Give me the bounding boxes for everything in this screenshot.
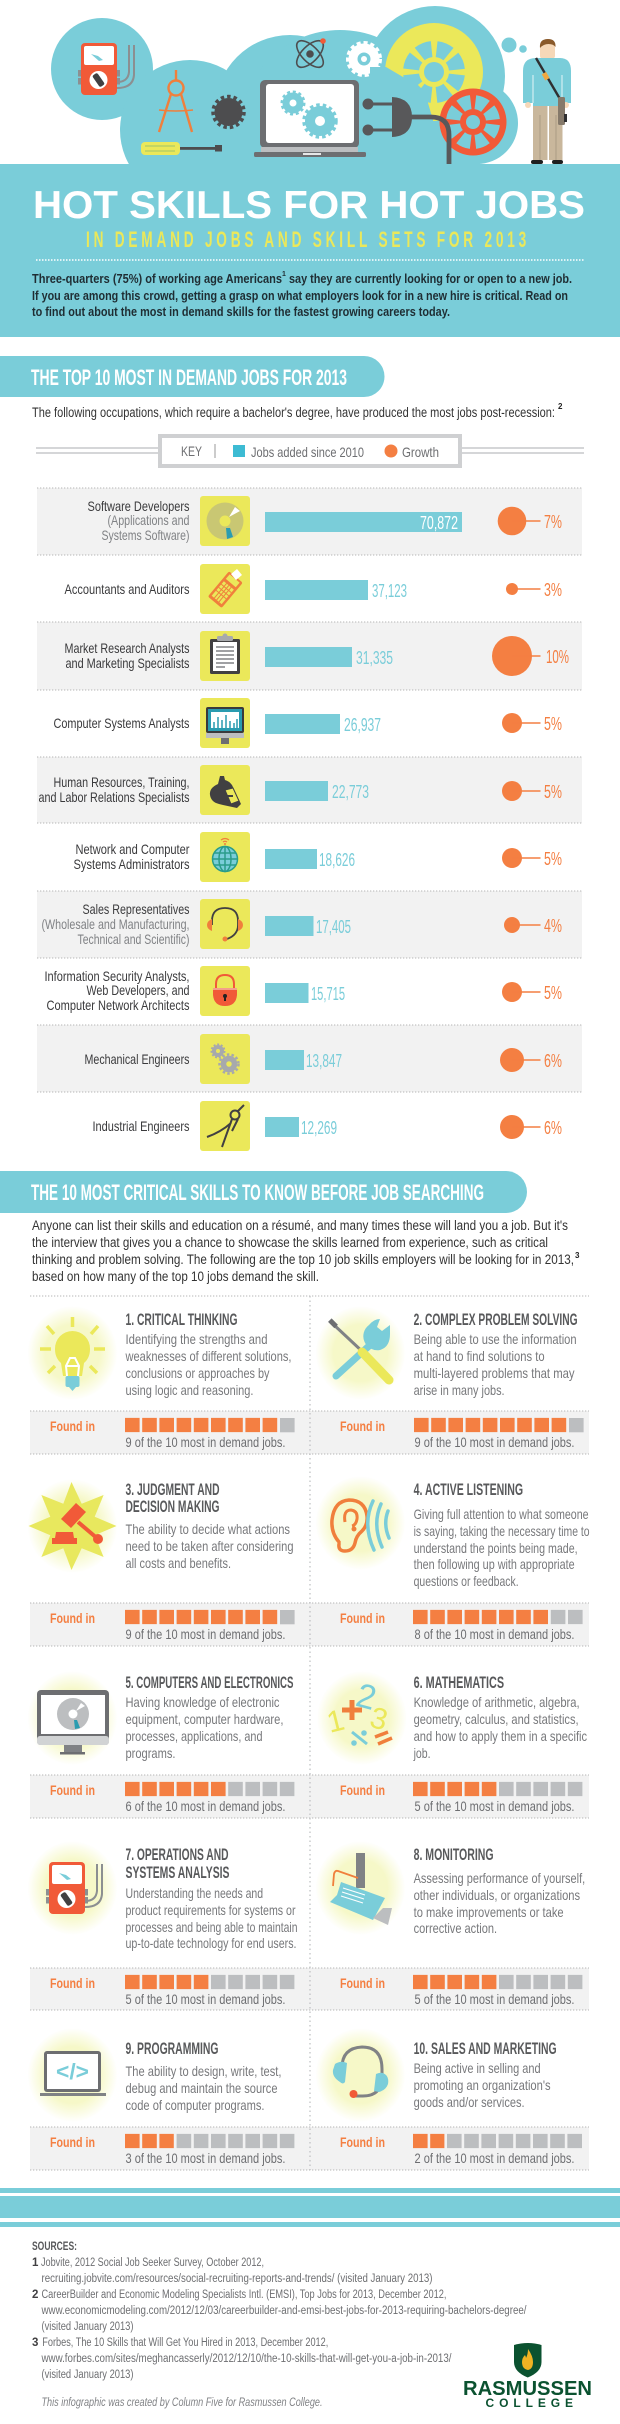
intro paragraph: to find out about the most in demand skills for the fastest growing careers today.	[32, 304, 450, 319]
job row 1: software developers: 7%	[544, 512, 562, 532]
credit line: This infographic was created by Column Five for Rasmussen College.	[42, 2397, 322, 2409]
skill 4: active listening: 8 of the 10 most in demand jobs.	[414, 1626, 574, 1642]
icon: headset	[333, 2047, 388, 2098]
skill 3: judgment and decision making: 3. JUDGMENT AND	[126, 1480, 220, 1499]
found-in strips and grid lines	[30, 1296, 589, 2170]
job row 3: market research: 31,335	[356, 648, 393, 668]
section heading: top 10 jobs	[0, 356, 384, 397]
job row 10: industrial engineers	[92, 1101, 562, 1151]
skill 7: operations and systems analysis: 7. OPERATIONS AND	[126, 1845, 228, 1864]
skill 2: complex problem solving	[316, 1306, 584, 1450]
Rasmussen College logo: COLLEGE	[486, 2396, 573, 2410]
sources list: CareerBuilder and Economic Modeling Specialists Intl. (EMSI), Top Jobs for 2013, December 2012,	[42, 2289, 446, 2301]
job row 4: computer systems analysts: Computer Systems Analysts	[54, 715, 190, 731]
skill 8: monitoring: other individuals, or organizations	[414, 1887, 580, 1903]
skill 2: complex problem solving: at hand to find solutions to	[414, 1348, 545, 1364]
job row 7: sales representatives: 4%	[544, 916, 562, 936]
icon: dark gear	[213, 96, 244, 128]
intro paragraph: say they are currently looking for or open to a new job.	[289, 271, 572, 286]
sources list: 3	[32, 2337, 38, 2349]
job row 1: software developers: (Applications and	[108, 512, 190, 528]
job row 8: information security: Information Security Analysts,	[44, 968, 190, 984]
job row 9: mechanical engineers: Mechanical Engineers	[84, 1051, 190, 1067]
skill 8: monitoring: to make improvements or take	[414, 1904, 564, 1920]
job row 4: computer systems analysts	[54, 698, 562, 748]
job row 6: network admins	[74, 832, 562, 882]
job row 9: mechanical engineers: 13,847	[306, 1051, 342, 1071]
job row 7: sales representatives	[42, 899, 562, 949]
skill 2: complex problem solving: arise in many jobs.	[414, 1382, 505, 1398]
hero illustration	[51, 6, 571, 230]
job row 1: software developers: Software Developers	[88, 498, 190, 514]
job row 5: human resources: Human Resources, Training,	[54, 774, 190, 790]
job row 3: market research	[64, 631, 569, 681]
skill 2: complex problem solving: Found in	[340, 1418, 385, 1434]
section heading: top 10 jobs: THE TOP 10 MOST IN DEMAND JOBS FOR 2013	[31, 365, 347, 390]
skill 4: active listening: Found in	[340, 1610, 385, 1626]
skill 3: judgment and decision making: need to be taken after considering	[126, 1538, 294, 1554]
skill 9: programming: code of computer programs.	[126, 2097, 264, 2113]
icon: drafting compass	[159, 70, 193, 132]
job row 5: human resources: 5%	[544, 782, 562, 802]
skill 8: monitoring: corrective action.	[414, 1920, 497, 1936]
skill 6: mathematics: Found in	[340, 1782, 385, 1798]
icon: white gear	[348, 43, 380, 75]
sources list: (visited January 2013)	[42, 2369, 134, 2381]
job row 1: software developers: Systems Software)	[102, 527, 190, 543]
skill 3: judgment and decision making: all costs and benefits.	[126, 1555, 231, 1571]
Rasmussen College logo: RASMUSSEN	[463, 2378, 592, 2400]
skill 4: active listening	[316, 1476, 590, 1642]
skill 9: programming: 9. PROGRAMMING	[126, 2039, 218, 2058]
skill 7: operations and systems analysis: product requirements for systems or	[126, 1902, 296, 1918]
key legend: Growth	[402, 444, 439, 460]
icon: desktop monitor with disc	[37, 1690, 109, 1754]
skill 1: critical thinking: weaknesses of different solutions,	[125, 1348, 292, 1364]
skill 7: operations and systems analysis: SYSTEMS ANALYSIS	[126, 1863, 230, 1882]
skill 10: sales and marketing: goods and/or services.	[414, 2094, 525, 2110]
skill 4: active listening: then following up with appropriate	[414, 1556, 575, 1572]
skill 9: programming: Found in	[50, 2134, 95, 2150]
sources list: recruiting.jobvite.com/resources/social-recruiting-reports-and-trends/ (visited January 2013)	[42, 2273, 433, 2285]
subtitle: IN DEMAND JOBS AND SKILL SETS FOR 2013	[86, 227, 530, 252]
skill 10: sales and marketing: Being active in selling and	[414, 2060, 541, 2076]
skills intro paragraph: the interview that gives you a chance to showcase the skills learned from experience, such as critical	[32, 1235, 548, 1250]
icon: numbers and operators: 3	[366, 1701, 391, 1737]
skill 8: monitoring: 8. MONITORING	[414, 1845, 494, 1864]
job row 4: computer systems analysts: 5%	[544, 714, 562, 734]
job row 6: network admins: Systems Administrators	[74, 856, 190, 872]
skills intro paragraph: 3	[575, 1251, 580, 1260]
icon: power plug	[362, 97, 449, 164]
icon: thought bubbles	[502, 38, 527, 53]
sources list: Forbes, The 10 Skills that Will Get You Hired in 2013, December 2012,	[42, 2337, 328, 2349]
skill 4: active listening: questions or feedback.	[414, 1573, 519, 1589]
job row 3: market research: Market Research Analysts	[64, 640, 190, 656]
skill 4: active listening: 4. ACTIVE LISTENING	[414, 1480, 523, 1499]
person with shoulder bag	[523, 39, 571, 164]
skill 3: judgment and decision making: DECISION MAKING	[126, 1497, 220, 1516]
job row 1: software developers	[88, 496, 562, 546]
job row 3: market research: and Marketing Specialists	[66, 655, 190, 671]
icon: meter	[78, 43, 134, 95]
job row 1: software developers: 70,872	[420, 513, 458, 533]
icon: numbers and operators	[324, 1676, 392, 1746]
title: HOT SKILLS FOR HOT JOBS	[33, 184, 585, 227]
skill 2: complex problem solving: Being able to use the information	[414, 1331, 577, 1347]
skill 9: programming	[28, 2028, 295, 2166]
intro paragraph	[32, 271, 572, 319]
job row 7: sales representatives: (Wholesale and Manufacturing,	[42, 916, 190, 932]
skill 9: programming: The ability to design, write, test,	[126, 2063, 282, 2079]
icon: laptop with code: </>	[56, 2059, 89, 2084]
skill 5: computers and electronics: Having knowledge of electronic	[126, 1694, 280, 1710]
skill 1: critical thinking: Found in	[50, 1418, 95, 1434]
skill 7: operations and systems analysis	[28, 1841, 298, 2007]
skill 7: operations and systems analysis: up-to-date technology for end users.	[126, 1935, 296, 1951]
footer stripes	[0, 2188, 620, 2227]
key legend	[36, 436, 584, 466]
sources list: www.forbes.com/sites/meghancasserly/2012/12/10/the-10-skills-that-will-get-you-a-job-in-2013/	[41, 2353, 452, 2365]
sources list: Jobvite, 2012 Social Job Seeker Survey, October 2012,	[41, 2257, 264, 2269]
icon: numbers and operators: 2	[352, 1676, 380, 1718]
skill 6: mathematics	[317, 1671, 587, 1814]
sources list: 2	[32, 2289, 38, 2301]
skill 5: computers and electronics: 6 of the 10 most in demand jobs.	[126, 1798, 286, 1814]
icon: gavel on star	[28, 1482, 116, 1570]
skill 6: mathematics: geometry, calculus, and statistics,	[414, 1711, 579, 1727]
icon: light bulb	[40, 1317, 105, 1391]
skills intro paragraph: based on how many of the top 10 jobs demand the skill.	[32, 1269, 319, 1284]
skill 10: sales and marketing: Found in	[340, 2134, 385, 2150]
job row 7: sales representatives: 17,405	[316, 917, 351, 937]
icon: large yellow gear	[370, 23, 483, 164]
skill 5: computers and electronics: 5. COMPUTERS AND ELECTRONICS	[126, 1673, 294, 1692]
skill 1: critical thinking: Identifying the strengths and	[126, 1331, 268, 1347]
job row 2: accountants	[64, 564, 562, 614]
jobs intro text: 2	[558, 402, 563, 411]
table row stripes	[37, 488, 582, 1092]
header band	[0, 164, 620, 337]
skill 3: judgment and decision making	[28, 1479, 295, 1642]
sources list	[32, 2241, 527, 2381]
icon: ear and sound waves	[332, 1500, 389, 1551]
job row 8: information security: 15,715	[311, 984, 345, 1004]
skill 6: mathematics: job.	[413, 1745, 431, 1761]
skill 5: computers and electronics: programs.	[126, 1745, 176, 1761]
job row 9: mechanical engineers	[84, 1034, 562, 1084]
skill 8: monitoring	[316, 1841, 585, 2007]
skill 10: sales and marketing	[316, 2028, 583, 2166]
sources list: 1	[32, 2257, 39, 2269]
key legend: Jobs added since 2010	[251, 444, 364, 460]
intro paragraph: 1	[282, 271, 286, 278]
skill 2: complex problem solving: multi-layered problems that may	[414, 1365, 575, 1381]
job row 2: accountants: Accountants and Auditors	[64, 581, 190, 597]
icon: wrench and screwdriver	[328, 1318, 390, 1380]
job row 8: information security	[44, 966, 562, 1016]
skill 6: mathematics: 5 of the 10 most in demand jobs.	[414, 1798, 574, 1814]
skill 1: critical thinking: 1. CRITICAL THINKING	[126, 1310, 238, 1329]
skill 3: judgment and decision making: 9 of the 10 most in demand jobs.	[126, 1626, 286, 1642]
icon: security camera	[330, 1853, 392, 1925]
job row 10: industrial engineers: Industrial Engineers	[92, 1118, 190, 1134]
skill 6: mathematics: Knowledge of arithmetic, algebra,	[414, 1694, 580, 1710]
job row 10: industrial engineers: 12,269	[301, 1118, 337, 1138]
key legend: KEY	[181, 444, 202, 459]
job row 6: network admins: 18,626	[319, 850, 355, 870]
skill 1: critical thinking: 9 of the 10 most in demand jobs.	[126, 1434, 286, 1450]
icon: laptop with code	[40, 2051, 106, 2096]
job row 8: information security: 5%	[544, 983, 562, 1003]
skill 5: computers and electronics: Found in	[50, 1782, 95, 1798]
skill 5: computers and electronics	[28, 1671, 295, 1814]
skill 3: judgment and decision making: Found in	[50, 1610, 95, 1626]
job row 6: network admins: Network and Computer	[76, 841, 190, 857]
icon: screwdriver	[141, 142, 222, 155]
skill 7: operations and systems analysis: Understanding the needs and	[126, 1885, 263, 1901]
job row 5: human resources: 22,773	[332, 782, 369, 802]
job row 8: information security: Web Developers, and	[86, 982, 190, 998]
icon: atom	[292, 36, 328, 72]
job row 3: market research: 10%	[546, 647, 569, 667]
job row 6: network admins: 5%	[544, 849, 562, 869]
skill 8: monitoring: 5 of the 10 most in demand jobs.	[414, 1991, 574, 2007]
job row 9: mechanical engineers: 6%	[544, 1051, 562, 1071]
job row 5: human resources	[38, 765, 562, 815]
intro paragraph: Three-quarters (75%) of working age Americans	[32, 271, 282, 286]
hero cloud backdrop	[51, 6, 518, 230]
icon: laptop with gears	[254, 80, 366, 157]
job row 2: accountants: 3%	[544, 580, 562, 600]
skill 7: operations and systems analysis: processes and being able to maintain	[126, 1919, 298, 1935]
job row 7: sales representatives: Technical and Scientific)	[78, 931, 190, 947]
skill 7: operations and systems analysis: 5 of the 10 most in demand jobs.	[126, 1991, 286, 2007]
skill 5: computers and electronics: equipment, computer hardware,	[126, 1711, 284, 1727]
skill 2: complex problem solving: 9 of the 10 most in demand jobs.	[414, 1434, 574, 1450]
skill 8: monitoring: Found in	[340, 1975, 385, 1991]
skill 7: operations and systems analysis: Found in	[50, 1975, 95, 1991]
icon: red gear	[440, 88, 506, 156]
sources list: (visited January 2013)	[42, 2321, 134, 2333]
job row 5: human resources: and Labor Relations Specialists	[38, 789, 190, 805]
skill 3: judgment and decision making: The ability to decide what actions	[126, 1521, 290, 1537]
skill 1: critical thinking	[28, 1306, 295, 1450]
sources list: SOURCES:	[32, 2241, 77, 2253]
job row 10: industrial engineers: 6%	[544, 1118, 562, 1138]
Rasmussen College logo	[463, 2343, 592, 2410]
job row 4: computer systems analysts: 26,937	[344, 715, 381, 735]
job row 7: sales representatives: Sales Representatives	[82, 901, 190, 917]
skill 10: sales and marketing: promoting an organization's	[414, 2077, 551, 2093]
skill 1: critical thinking: using logic and reasoning.	[126, 1382, 254, 1398]
icon: meter	[46, 1862, 102, 1914]
job row 2: accountants: 37,123	[372, 581, 407, 601]
skill 5: computers and electronics: processes, applications, and	[126, 1728, 262, 1744]
icon: numbers and operators: 1	[324, 1704, 348, 1740]
skill 9: programming: 3 of the 10 most in demand jobs.	[126, 2150, 286, 2166]
skill 1: critical thinking: conclusions or approaches by	[126, 1365, 270, 1381]
job row 8: information security: Computer Network Architects	[46, 997, 190, 1013]
skill 10: sales and marketing: 2 of the 10 most in demand jobs.	[414, 2150, 574, 2166]
sources list: www.economicmodeling.com/2012/12/03/careerbuilder-and-emsi-best-jobs-for-2013-requiring-bachelors-degree/	[41, 2305, 527, 2317]
skills intro paragraph	[32, 1218, 580, 1284]
skill 6: mathematics: 6. MATHEMATICS	[414, 1673, 504, 1692]
section heading: critical skills	[0, 1171, 527, 1213]
skill 9: programming: debug and maintain the source	[126, 2080, 278, 2096]
